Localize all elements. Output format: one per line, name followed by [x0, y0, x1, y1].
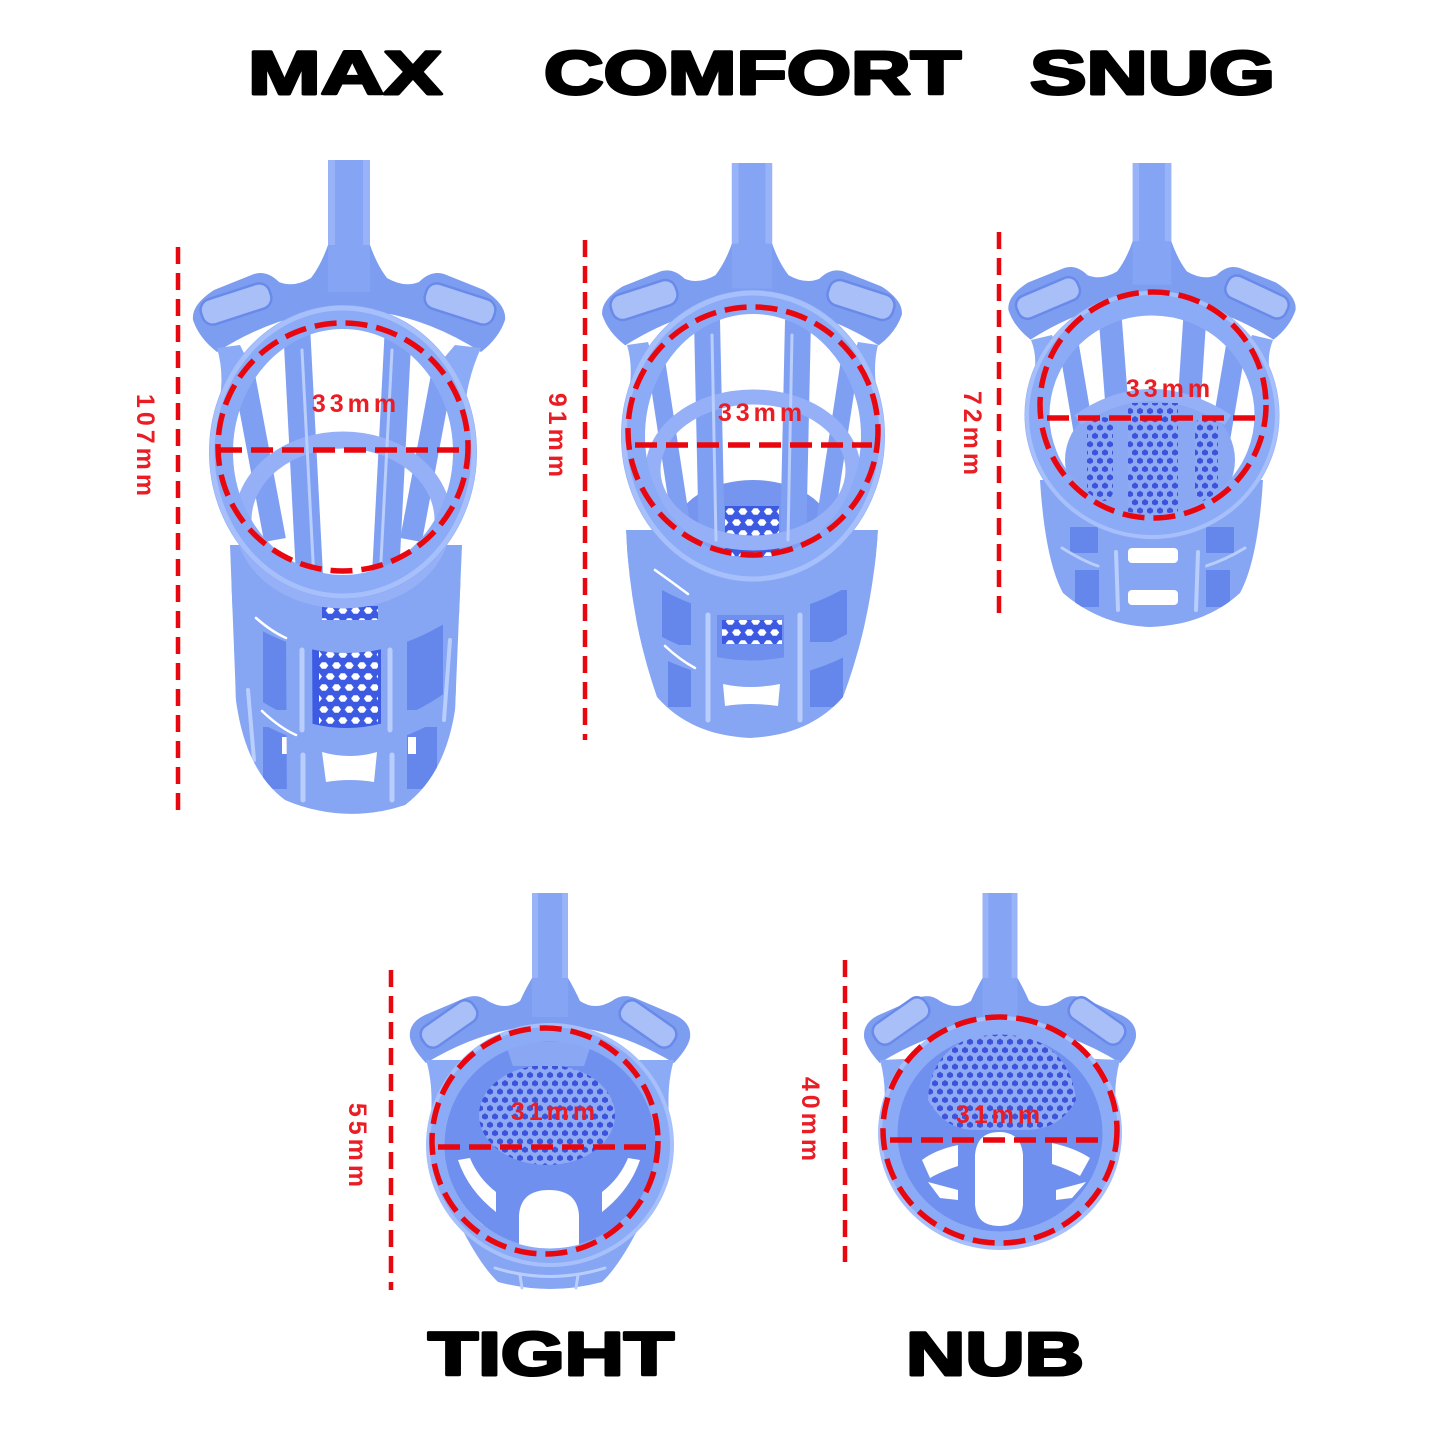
main ring: [1027, 293, 1277, 537]
cage interior: [633, 304, 873, 580]
title: SNUG: SNUG: [1030, 39, 1275, 107]
height marker: 55mm: [343, 1103, 371, 1191]
main ring: [624, 293, 882, 579]
cage body: [1040, 480, 1263, 627]
lower windows and bars: [620, 545, 885, 740]
main ring: [880, 1018, 1120, 1248]
lower windows and bars: [225, 590, 470, 815]
grip pads: [608, 277, 897, 323]
bottom ridges: [495, 1268, 605, 1288]
cage body: [460, 1225, 640, 1289]
cage body: [626, 530, 878, 738]
diameter marker: [432, 1028, 658, 1254]
cage interior: [888, 1022, 1112, 1242]
panel: SNUG cage: [958, 163, 1296, 630]
main ring: [428, 1025, 672, 1265]
ring necks: [627, 342, 878, 398]
cage body: [230, 545, 462, 814]
main ring: [212, 308, 474, 596]
panel: NUB cage: [796, 893, 1136, 1262]
diameter marker: 33mm: [718, 399, 806, 427]
cage interior: [1044, 306, 1260, 528]
height marker: 107mm: [131, 394, 159, 500]
diameter marker: 33mm: [312, 390, 400, 418]
diameter marker: [883, 1017, 1117, 1243]
top yoke and strap: [602, 163, 902, 345]
ring necks: [426, 1060, 674, 1145]
diameter marker: [1040, 292, 1266, 518]
height marker: 40mm: [796, 1077, 824, 1165]
diameter marker: 31mm: [956, 1101, 1044, 1129]
cage interior: [221, 318, 465, 600]
height marker: 72mm: [958, 391, 986, 479]
title: COMFORT: COMFORT: [544, 39, 961, 107]
grip pads: [869, 993, 1129, 1049]
diameter marker: 33mm: [1126, 375, 1214, 403]
diameter marker: [218, 323, 468, 571]
diameter marker: 31mm: [511, 1098, 599, 1126]
panel: MAX cage: [131, 160, 505, 815]
ring necks: [1030, 335, 1274, 392]
panel: COMFORT cage: [543, 163, 902, 740]
title: MAX: MAX: [248, 39, 442, 107]
ring necks: [880, 1058, 1120, 1133]
lower windows and bars: [1062, 527, 1245, 630]
top yoke and strap: [864, 893, 1136, 1063]
title: TIGHT: TIGHT: [428, 1320, 674, 1388]
grip pads: [198, 281, 498, 327]
grip pads: [417, 996, 680, 1052]
grip pads: [1013, 272, 1292, 322]
ring necks: [217, 345, 481, 398]
cage interior: [442, 1032, 658, 1248]
top yoke and strap: [1008, 163, 1296, 340]
height marker: 91mm: [543, 393, 571, 481]
top yoke and strap: [410, 893, 690, 1063]
diameter marker: [628, 307, 878, 555]
panel: TIGHT cage: [343, 893, 690, 1290]
title: NUB: NUB: [906, 1320, 1084, 1388]
top yoke and strap: [193, 160, 505, 352]
